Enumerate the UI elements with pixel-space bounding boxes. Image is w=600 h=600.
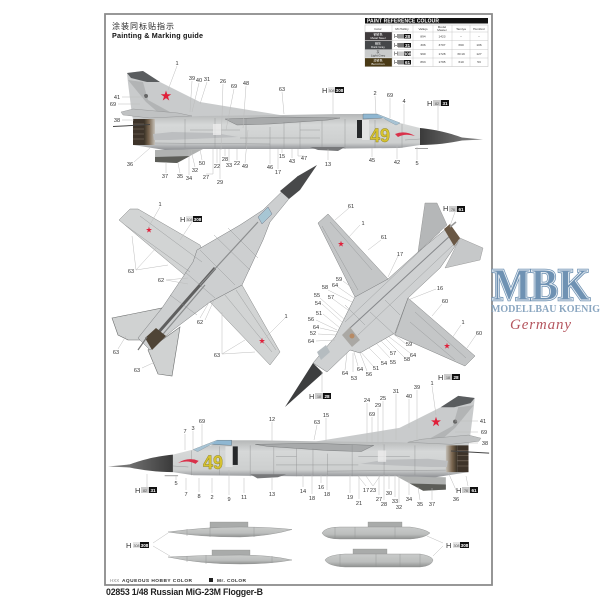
paint code badges: right plan view: 76 bbox=[451, 208, 455, 212]
table: paint reference colour: 1728 bbox=[439, 52, 446, 56]
part numbers: side view: 36 bbox=[127, 162, 133, 168]
part numbers: side view: 5 bbox=[415, 161, 419, 167]
part numbers: bottom side view: 18 bbox=[324, 492, 330, 498]
part numbers: left plan view bbox=[113, 202, 288, 374]
paint code badges: drop tanks bbox=[126, 541, 469, 550]
part numbers: side view: 35 bbox=[177, 174, 183, 180]
page frame bbox=[105, 14, 492, 585]
part numbers: bottom side view: 9 bbox=[227, 497, 231, 503]
part numbers: bottom side view: 69 bbox=[199, 419, 205, 425]
part numbers: bottom side view: 69 bbox=[481, 430, 487, 436]
part numbers: right plan view: 60 bbox=[442, 299, 448, 305]
part numbers: bottom side view: 17 bbox=[363, 488, 369, 494]
tank 1 bbox=[168, 522, 292, 537]
part numbers: bottom side view: 63 bbox=[314, 420, 320, 426]
part numbers: bottom side view: 35 bbox=[417, 502, 423, 508]
table: paint reference colour: Metal Steel bbox=[370, 36, 386, 40]
part numbers: side view: 34 bbox=[186, 176, 192, 182]
part numbers: right plan view: 55 bbox=[390, 360, 396, 366]
part numbers: left plan view: 1 bbox=[284, 314, 288, 320]
radome bbox=[280, 165, 317, 199]
paint code badges: right plan view bbox=[309, 204, 465, 401]
table: paint reference colour: PAINT REFERENCE COLOUR bbox=[367, 18, 439, 24]
part numbers: side view: 17 bbox=[275, 170, 281, 176]
part numbers: side view: 2 bbox=[373, 91, 377, 97]
part numbers: bottom side view: 36 bbox=[453, 497, 459, 503]
part numbers: side view: 1 bbox=[175, 61, 179, 67]
radome bbox=[285, 363, 323, 407]
table: paint reference colour: 894 bbox=[420, 34, 426, 38]
table: paint reference colour: H bbox=[394, 60, 398, 66]
part numbers: bottom side view: 3 bbox=[191, 426, 195, 432]
wings and tailplanes bbox=[119, 209, 208, 278]
part numbers: side view: 69 bbox=[387, 93, 393, 99]
part numbers: right plan view: 64 bbox=[357, 367, 363, 373]
part numbers: bottom side view: 30 bbox=[386, 491, 392, 497]
table: paint reference colour: 127 bbox=[476, 52, 482, 56]
nozzle bbox=[444, 224, 460, 246]
part numbers: bottom side view: 69 bbox=[369, 412, 375, 418]
part numbers: bottom side view: 14 bbox=[300, 489, 306, 495]
part numbers: side view: 27 bbox=[203, 175, 209, 181]
watermark logo: MBK Modellbau Koenig Germany bbox=[491, 259, 600, 333]
table: paint reference colour: Dark Gray bbox=[371, 45, 385, 49]
yellow number 49: 49 bbox=[203, 453, 223, 474]
part numbers: side view: 50 bbox=[199, 161, 205, 167]
part numbers: right plan view: 59 bbox=[406, 342, 412, 348]
part numbers: bottom side view: 28 bbox=[381, 502, 387, 508]
table: paint reference colour: X10 bbox=[458, 60, 464, 64]
part numbers: right plan view: 64 bbox=[410, 353, 416, 359]
part numbers: right plan view: 64 bbox=[313, 325, 319, 331]
part numbers: right plan view: 54 bbox=[315, 301, 321, 307]
part numbers: left plan view: 1 bbox=[158, 202, 162, 208]
part numbers: right plan view: 57 bbox=[390, 351, 396, 357]
part numbers: side view: 38 bbox=[114, 118, 120, 124]
part numbers: bottom side view: 33 bbox=[392, 499, 398, 505]
part numbers: side view: 47 bbox=[301, 156, 307, 162]
tank 3 bbox=[322, 522, 430, 539]
part numbers: left plan view: 63 bbox=[134, 368, 140, 374]
part numbers: side view: 41 bbox=[114, 95, 120, 101]
part numbers: bottom side view: 39 bbox=[414, 385, 420, 391]
table: paint reference colour: -- bbox=[478, 34, 480, 38]
icon: red star on fin bbox=[431, 417, 441, 426]
part numbers: bottom side view: 16 bbox=[318, 485, 324, 491]
part numbers: side view: 29 bbox=[217, 180, 223, 186]
part numbers: bottom side view: 19 bbox=[347, 495, 353, 501]
paint code badges: bottom side view: 76 bbox=[464, 489, 468, 493]
part numbers: left plan view: 63 bbox=[113, 350, 119, 356]
part numbers: left plan view: 62 bbox=[197, 320, 203, 326]
paint code badges: bottom side view: 61 bbox=[471, 488, 477, 493]
part numbers: side view: 33 bbox=[226, 163, 232, 169]
paint code badges: right plan view: 28 bbox=[453, 375, 459, 380]
table: paint reference colour: Color bbox=[374, 27, 382, 31]
part numbers: side view: 39 bbox=[189, 76, 195, 82]
part numbers: side view: 48 bbox=[243, 81, 249, 87]
part numbers: side view: 43 bbox=[289, 159, 295, 165]
colour key legend bbox=[110, 578, 247, 584]
part numbers: right plan view: 54 bbox=[381, 361, 387, 367]
part numbers: bottom side view: 23 bbox=[370, 488, 376, 494]
fuselage bbox=[313, 228, 458, 372]
title: painting and marking guide: 涂装同标贴指示 bbox=[112, 21, 175, 31]
part numbers: right plan view: 64 bbox=[342, 371, 348, 377]
part numbers: bottom side view: 27 bbox=[376, 497, 382, 503]
table: paint reference colour: 306 bbox=[420, 43, 426, 47]
part numbers: side view: 69 bbox=[231, 84, 237, 90]
title: painting and marking guide bbox=[112, 21, 203, 40]
table: paint reference colour: 990 bbox=[420, 52, 426, 56]
paint code badges: drop tanks: 308 bbox=[134, 544, 140, 548]
table: paint reference colour: Tamiya bbox=[456, 27, 466, 31]
part numbers: bottom side view: 2 bbox=[210, 495, 214, 501]
part numbers: bottom side view: 12 bbox=[269, 417, 275, 423]
table: paint reference colour: -- bbox=[460, 34, 462, 38]
table: paint reference colour: 1795 bbox=[439, 60, 446, 64]
part numbers: right plan view: 16 bbox=[437, 286, 443, 292]
part numbers: side view: 40 bbox=[196, 78, 202, 84]
aircraft: bottom side view bbox=[108, 396, 489, 491]
part numbers: right plan view: 51 bbox=[373, 366, 379, 372]
fuselage bbox=[138, 176, 298, 350]
leader lines: left plan view bbox=[118, 207, 285, 368]
paint code badges: bottom side view: 31 bbox=[150, 488, 156, 493]
table: paint reference colour: 烧铁色 bbox=[373, 58, 383, 62]
part numbers: bottom side view: 8 bbox=[197, 494, 201, 500]
paint code badges: drop tanks: 308 bbox=[461, 543, 469, 548]
part numbers: side view: 63 bbox=[279, 87, 285, 93]
part numbers: side view: 4 bbox=[402, 99, 406, 105]
table: paint reference colour: 31 bbox=[405, 43, 410, 48]
title: painting and marking guide: Painting & Marking guide bbox=[112, 31, 203, 40]
table: paint reference colour: 53 bbox=[477, 60, 481, 64]
part numbers: side view: 32 bbox=[192, 168, 198, 174]
part numbers: right plan view: 53 bbox=[351, 376, 357, 382]
table: paint reference colour: 863 bbox=[420, 60, 426, 64]
paint code badges: right plan view: 18 bbox=[446, 376, 450, 380]
table: paint reference colour: Vallejo bbox=[418, 27, 428, 31]
paint code badges: right plan view: H bbox=[443, 204, 448, 213]
paint code badges: side view: 308 bbox=[336, 88, 344, 93]
part numbers: bottom side view: 5 bbox=[174, 481, 178, 487]
paint code badges: side view: 308 bbox=[328, 89, 334, 93]
part numbers: right plan view: 52 bbox=[310, 331, 316, 337]
part numbers: right plan view: 58 bbox=[322, 285, 328, 291]
paint code badges: drop tanks: 308 bbox=[454, 544, 460, 548]
part numbers: side view: 28 bbox=[222, 157, 228, 163]
paint code badges: bottom side view: 82 bbox=[143, 489, 147, 493]
part numbers: right plan view: 1 bbox=[461, 320, 465, 326]
part numbers: right plan view: 64 bbox=[308, 339, 314, 345]
part numbers: bottom side view: 41 bbox=[480, 419, 486, 425]
part numbers: bottom side view: 40 bbox=[406, 394, 412, 400]
part numbers: side view: 69 bbox=[110, 102, 116, 108]
part numbers: side view: 46 bbox=[267, 165, 273, 171]
colour key legend: HXX bbox=[110, 578, 119, 583]
aircraft: right plan view bbox=[285, 203, 483, 407]
part numbers: side view: 37 bbox=[162, 174, 168, 180]
colour key legend: Mr. COLOR bbox=[217, 578, 247, 584]
table: paint reference colour: H bbox=[394, 43, 398, 49]
part numbers: right plan view bbox=[308, 204, 482, 382]
part numbers: right plan view: 17 bbox=[397, 252, 403, 258]
part numbers: bottom side view: 18 bbox=[309, 496, 315, 502]
part numbers: bottom side view: 7 bbox=[184, 492, 188, 498]
part numbers: bottom side view: 11 bbox=[241, 495, 247, 501]
leader lines: side view bbox=[118, 66, 438, 179]
part numbers: right plan view: 55 bbox=[314, 293, 320, 299]
table: paint reference colour: 灰 bbox=[376, 49, 380, 54]
paint code badges: drop tanks: 308 bbox=[141, 543, 149, 548]
paint code badge: left plan view bbox=[180, 215, 202, 224]
watermark logo: MBK Modellbau Koenig Germany: Germany bbox=[510, 317, 571, 333]
icon: red star on fin bbox=[161, 90, 171, 100]
paint code badges: right plan view: H bbox=[438, 373, 443, 382]
part numbers: right plan view: 58 bbox=[404, 357, 410, 363]
part numbers: bottom side view: 29 bbox=[375, 403, 381, 409]
part numbers: right plan view: 60 bbox=[476, 331, 482, 337]
table: paint reference colour: Light Grey bbox=[371, 54, 386, 58]
paint code badges: side view: H bbox=[322, 86, 327, 95]
part numbers: left plan view: 63 bbox=[214, 353, 220, 359]
paint code badges: side view: H bbox=[427, 99, 432, 108]
part numbers: right plan view: 64 bbox=[332, 283, 338, 289]
table: paint reference colour: H bbox=[394, 34, 398, 40]
part numbers: side view: 31 bbox=[204, 77, 210, 83]
part numbers: bottom side view bbox=[174, 381, 488, 511]
wing stars bbox=[146, 227, 152, 233]
intake and cockpit detail bbox=[342, 327, 360, 347]
part numbers: bottom side view: 38 bbox=[482, 441, 488, 447]
paint code badge: left plan view: 308 bbox=[186, 218, 192, 222]
table: paint reference colour: 钢铁色 bbox=[373, 32, 383, 36]
table: paint reference colour: 1423 bbox=[439, 34, 446, 38]
part numbers: side view bbox=[110, 61, 419, 186]
wings and tailplanes bbox=[318, 214, 388, 297]
part numbers: bottom side view: 31 bbox=[393, 389, 399, 395]
table: paint reference colour: Model bbox=[438, 25, 447, 29]
aircraft: left plan view bbox=[112, 165, 317, 376]
aircraft: top side view bbox=[113, 71, 483, 163]
watermark logo: MBK Modellbau Koenig Germany: MBK bbox=[492, 259, 590, 310]
tank 2 bbox=[168, 550, 292, 564]
product name footer: 02853 1/48 Russian MiG-23M Flogger-B bbox=[106, 587, 263, 597]
part numbers: right plan view: 57 bbox=[328, 295, 334, 301]
wing stars bbox=[338, 241, 344, 247]
paint code badges: right plan view: 28 bbox=[324, 394, 330, 399]
watermark logo: MBK Modellbau Koenig Germany: MBK bbox=[492, 259, 590, 310]
part numbers: side view: 22 bbox=[234, 161, 240, 167]
part numbers: bottom side view: 1 bbox=[430, 381, 434, 387]
paint code badges: drop tanks: H bbox=[126, 541, 131, 550]
part numbers: bottom side view: 7 bbox=[183, 429, 187, 435]
part numbers: side view: 49 bbox=[242, 164, 248, 170]
part numbers: left plan view: 62 bbox=[158, 278, 164, 284]
part numbers: side view: 26 bbox=[220, 79, 226, 85]
table: paint reference colour: 61 bbox=[405, 60, 410, 65]
part numbers: right plan view: 61 bbox=[381, 235, 387, 241]
colour key legend: AQUEOUS HOBBY COLOR bbox=[122, 578, 193, 584]
table: paint reference colour: 308 bbox=[404, 52, 412, 56]
part numbers: side view: 45 bbox=[369, 158, 375, 164]
part numbers: bottom side view: 25 bbox=[380, 396, 386, 402]
drop tanks bbox=[168, 522, 433, 567]
paint code badges: side view: 31 bbox=[442, 101, 448, 106]
part numbers: right plan view: 59 bbox=[336, 277, 342, 283]
part numbers: right plan view: 56 bbox=[366, 372, 372, 378]
paint code badges: side view: 82 bbox=[435, 102, 439, 106]
part numbers: right plan view: 51 bbox=[316, 311, 322, 317]
part numbers: bottom side view: 21 bbox=[356, 501, 362, 507]
part numbers: right plan view: 61 bbox=[348, 204, 354, 210]
table: paint reference colour: 3707 bbox=[439, 43, 446, 47]
part numbers: left plan view: 63 bbox=[128, 269, 134, 275]
table: paint reference colour: 106 bbox=[476, 43, 482, 47]
part numbers: bottom side view: 32 bbox=[396, 505, 402, 511]
part numbers: bottom side view: 24 bbox=[364, 398, 370, 404]
part numbers: bottom side view: 37 bbox=[429, 502, 435, 508]
part numbers: side view: 22 bbox=[214, 164, 220, 170]
table: paint reference colour: XF19 bbox=[457, 52, 465, 56]
part numbers: bottom side view: 15 bbox=[323, 413, 329, 419]
table: paint reference colour: Mr.Hobby bbox=[395, 27, 409, 31]
table: paint reference colour: Humbrol bbox=[473, 27, 485, 31]
table: paint reference colour bbox=[365, 18, 488, 66]
paint code badges: bottom side view: H bbox=[135, 486, 140, 495]
leader lines: drop tanks bbox=[153, 533, 443, 556]
table: paint reference colour: H bbox=[394, 52, 398, 58]
table: paint reference colour: 暗灰 bbox=[375, 40, 381, 46]
yellow number 49: 49 bbox=[370, 126, 390, 147]
tank 4 bbox=[325, 549, 433, 567]
part numbers: side view: 42 bbox=[394, 160, 400, 166]
paint code badges: bottom side view bbox=[135, 486, 478, 495]
table: paint reference colour: Burnt Iron bbox=[371, 62, 385, 66]
table: paint reference colour: X60 bbox=[458, 43, 464, 47]
paint code badges: bottom side view: H bbox=[456, 486, 461, 495]
paint code badges: drop tanks: H bbox=[446, 541, 451, 550]
leader lines: right plan view bbox=[316, 208, 476, 392]
part numbers: right plan view: 56 bbox=[308, 317, 314, 323]
table: paint reference colour: 28 bbox=[405, 34, 410, 39]
table: paint reference colour: Master bbox=[437, 28, 447, 32]
canopy bbox=[258, 207, 272, 224]
paint code badges: right plan view: 18 bbox=[317, 395, 321, 399]
part numbers: side view: 15 bbox=[279, 154, 285, 160]
leader lines: bottom side view bbox=[147, 386, 478, 503]
paint code badges: right plan view: H bbox=[309, 392, 314, 401]
part numbers: side view: 13 bbox=[325, 162, 331, 168]
paint code badges: side view bbox=[322, 86, 449, 108]
paint code badge: left plan view: H bbox=[180, 215, 185, 224]
part numbers: right plan view: 1 bbox=[361, 221, 365, 227]
part numbers: bottom side view: 34 bbox=[406, 497, 412, 503]
part numbers: bottom side view: 13 bbox=[269, 492, 275, 498]
paint code badge: left plan view: 308 bbox=[194, 217, 202, 222]
paint code badges: right plan view: 61 bbox=[458, 207, 464, 212]
